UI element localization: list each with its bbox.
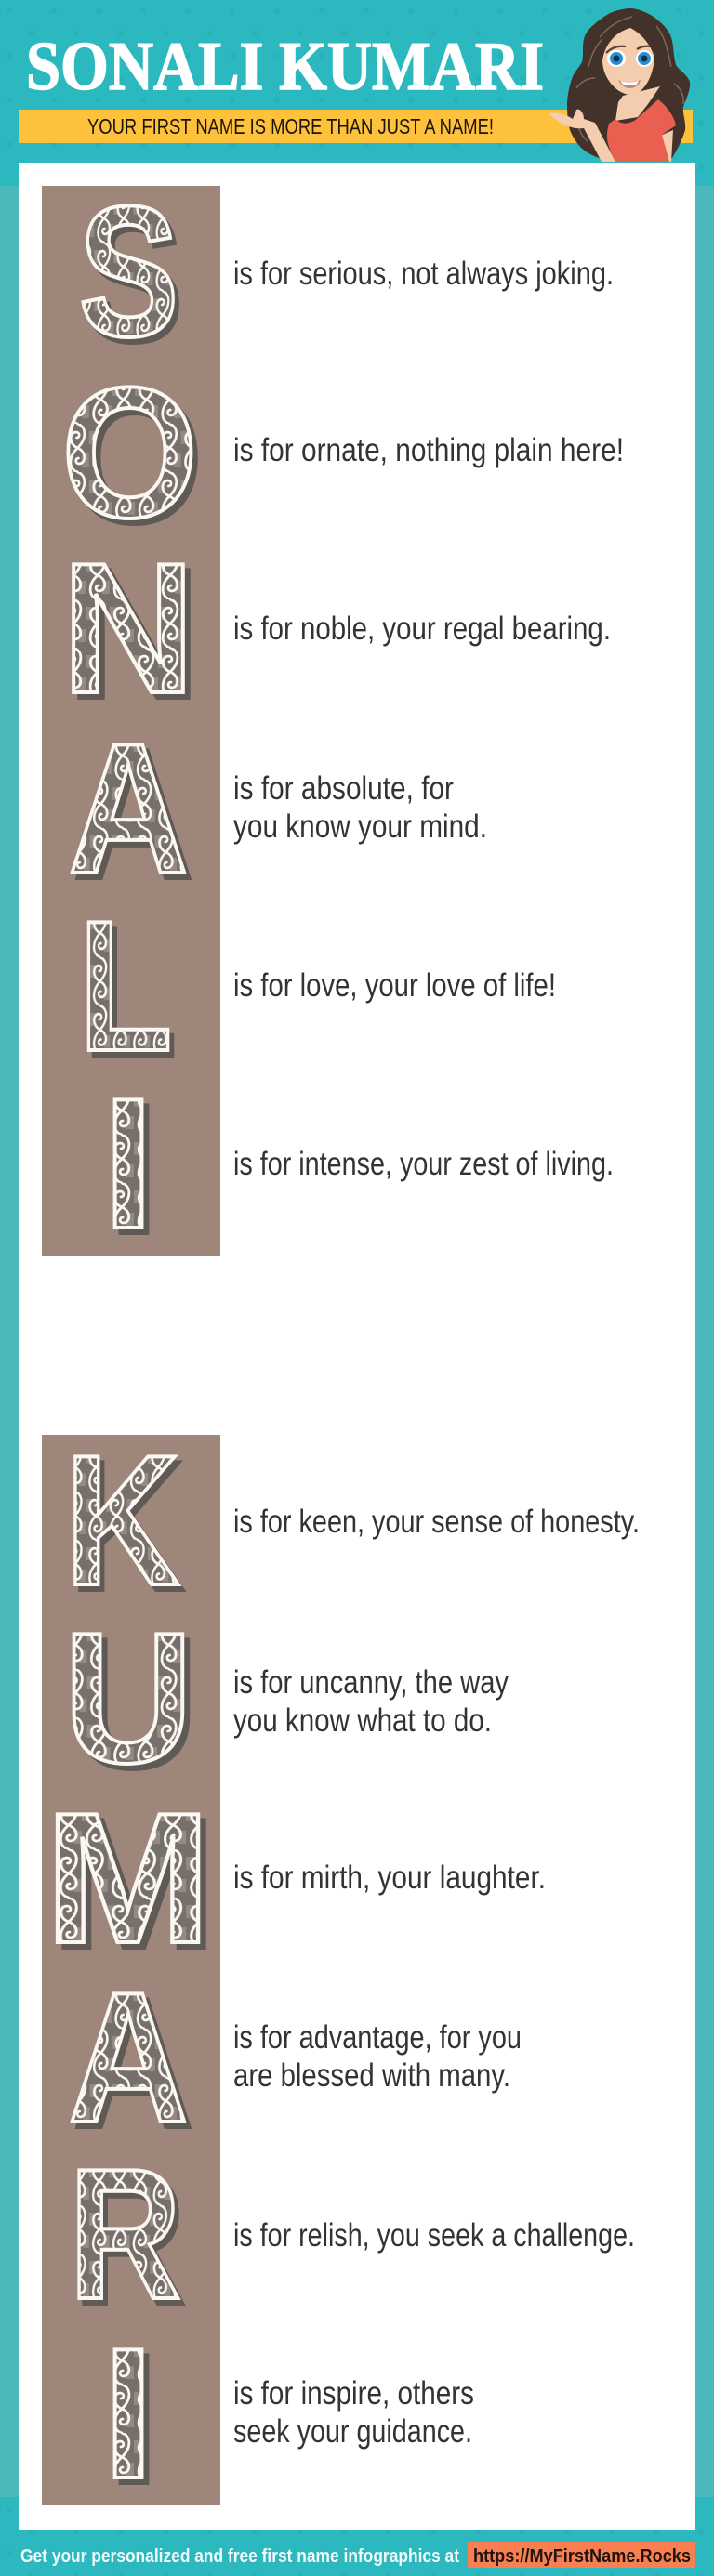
text: A lines: is for absolute, for xyxy=(233,770,454,807)
text: A lines xyxy=(233,770,487,845)
letter A: A xyxy=(68,1954,189,2162)
footer call to action: Get your personalized and free first name infographics at xyxy=(20,2546,459,2567)
text: R line: is for relish, you seek a challenge. xyxy=(233,2217,635,2254)
letter L: L xyxy=(78,882,173,1089)
letter K: K xyxy=(64,1416,180,1624)
letter A: A xyxy=(68,705,189,913)
text: A lines: is for advantage, for you xyxy=(233,2019,522,2056)
letter N: N xyxy=(61,525,195,732)
text: S line: is for serious, not always joking. xyxy=(233,256,614,292)
text: A lines xyxy=(233,2019,522,2094)
text: U lines: you know what to do. xyxy=(233,1702,492,1739)
panel: SONALI letters column xyxy=(42,186,220,1256)
text: K line: is for keen, your sense of honesty. xyxy=(233,1504,640,1540)
left side strip xyxy=(0,186,19,2497)
letter S: S xyxy=(78,167,179,375)
text: L line: is for love, your love of life! xyxy=(233,967,556,1004)
letter M: M xyxy=(45,1775,211,1982)
text: U lines xyxy=(233,1664,509,1739)
letter I: I xyxy=(102,2310,154,2517)
letter O: O xyxy=(61,349,198,557)
letter U: U xyxy=(63,1594,193,1802)
letter R: R xyxy=(69,2131,181,2338)
tagline banner: YOUR FIRST NAME IS MORE THAN JUST A NAME! xyxy=(87,114,494,138)
text: N line: is for noble, your regal bearing. xyxy=(233,611,611,647)
text: A lines: are blessed with many. xyxy=(233,2057,510,2094)
tagline banner xyxy=(19,110,693,143)
title: SONALI KUMARI xyxy=(26,29,544,105)
right side strip xyxy=(695,186,714,2497)
text: I lines: seek your guidance. xyxy=(233,2413,472,2450)
letter I: I xyxy=(102,1060,154,1268)
text: I lines: is for inspire, others xyxy=(233,2375,474,2412)
icon: cartoon woman mascot xyxy=(549,8,690,162)
text: A lines: you know your mind. xyxy=(233,808,487,845)
panel: KUMARI letters column xyxy=(42,1435,220,2505)
text: I line: is for intense, your zest of living. xyxy=(233,1146,614,1182)
text: M line: is for mirth, your laughter. xyxy=(233,1860,546,1896)
text: U lines: is for uncanny, the way xyxy=(233,1664,509,1701)
footer link badge: https://MyFirstName.Rocks xyxy=(473,2546,691,2567)
text: I lines xyxy=(233,2375,474,2450)
text: O line: is for ornate, nothing plain here! xyxy=(233,432,624,468)
